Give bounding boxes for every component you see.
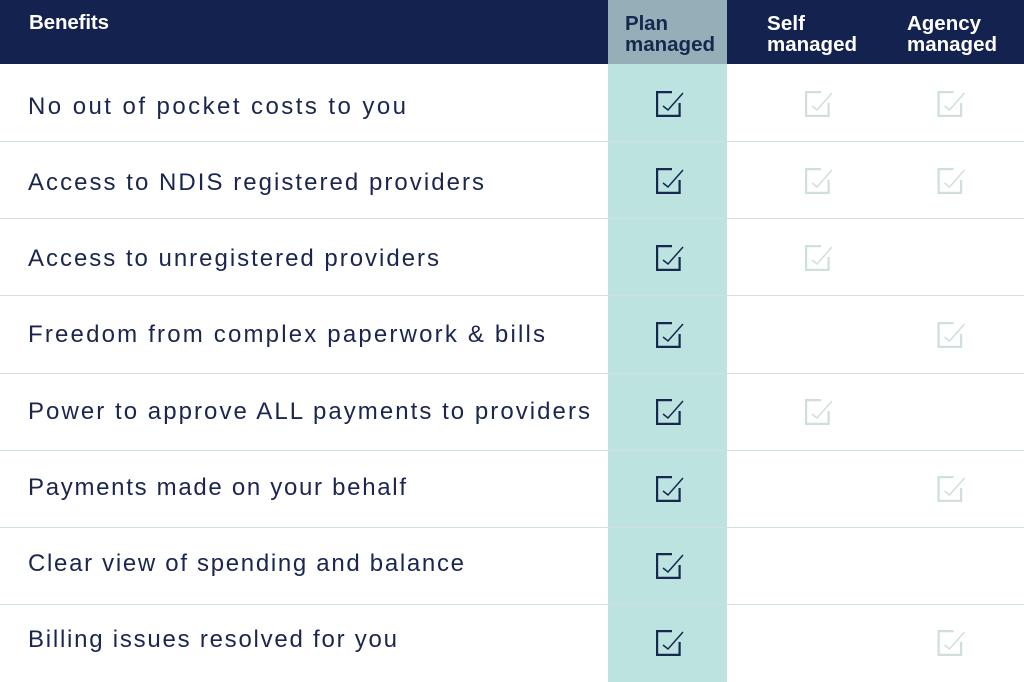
heading: Plan managed: Plan [625, 12, 668, 35]
heading: Self managed: Self [767, 12, 805, 35]
icon: check row 8 plan [657, 631, 683, 655]
icon: check row 3 self [806, 246, 832, 270]
icon: check row 2 agency [939, 169, 964, 193]
plan managed header cell [608, 0, 727, 64]
icon: check row 1 plan [657, 92, 683, 116]
heading: Plan managed [625, 12, 715, 56]
row 3 label: Access to unregistered providers [28, 245, 439, 272]
heading: Agency managed: managed [907, 33, 997, 56]
icon: check row 4 agency [939, 323, 964, 347]
icon: check row 5 plan [657, 400, 683, 424]
icon: check row 5 self [806, 400, 832, 424]
icon: check row 1 agency [939, 92, 964, 116]
icon: check row 4 plan [657, 323, 683, 347]
row 5 label: Power to approve ALL payments to providers [28, 398, 590, 425]
row 2 label: Access to NDIS registered providers [28, 169, 484, 196]
icon: check row 6 plan [657, 477, 683, 501]
row 7 label: Clear view of spending and balance [28, 550, 464, 577]
icon: check row 2 self [806, 169, 832, 193]
header bar [0, 0, 1024, 64]
row 1 label: No out of pocket costs to you [28, 93, 406, 120]
heading: Agency managed [907, 12, 997, 56]
heading: Self managed: managed [767, 33, 857, 56]
row 6 label: Payments made on your behalf [28, 474, 406, 501]
heading: Agency managed: Agency [907, 12, 982, 35]
row 8 label: Billing issues resolved for you [28, 626, 397, 653]
heading: Self managed [767, 12, 857, 56]
icon: check row 8 agency [939, 631, 964, 655]
icon: check row 1 self [806, 92, 832, 116]
heading: Plan managed: managed [625, 33, 715, 56]
icon: check row 7 plan [657, 554, 683, 578]
heading: Benefits: Benefits [29, 11, 109, 34]
icon: check row 6 agency [939, 477, 964, 501]
icon: check row 2 plan [657, 169, 683, 193]
highlighted plan managed column [608, 64, 727, 682]
row 4 label: Freedom from complex paperwork & bills [28, 321, 545, 348]
icon: check row 3 plan [657, 246, 683, 270]
